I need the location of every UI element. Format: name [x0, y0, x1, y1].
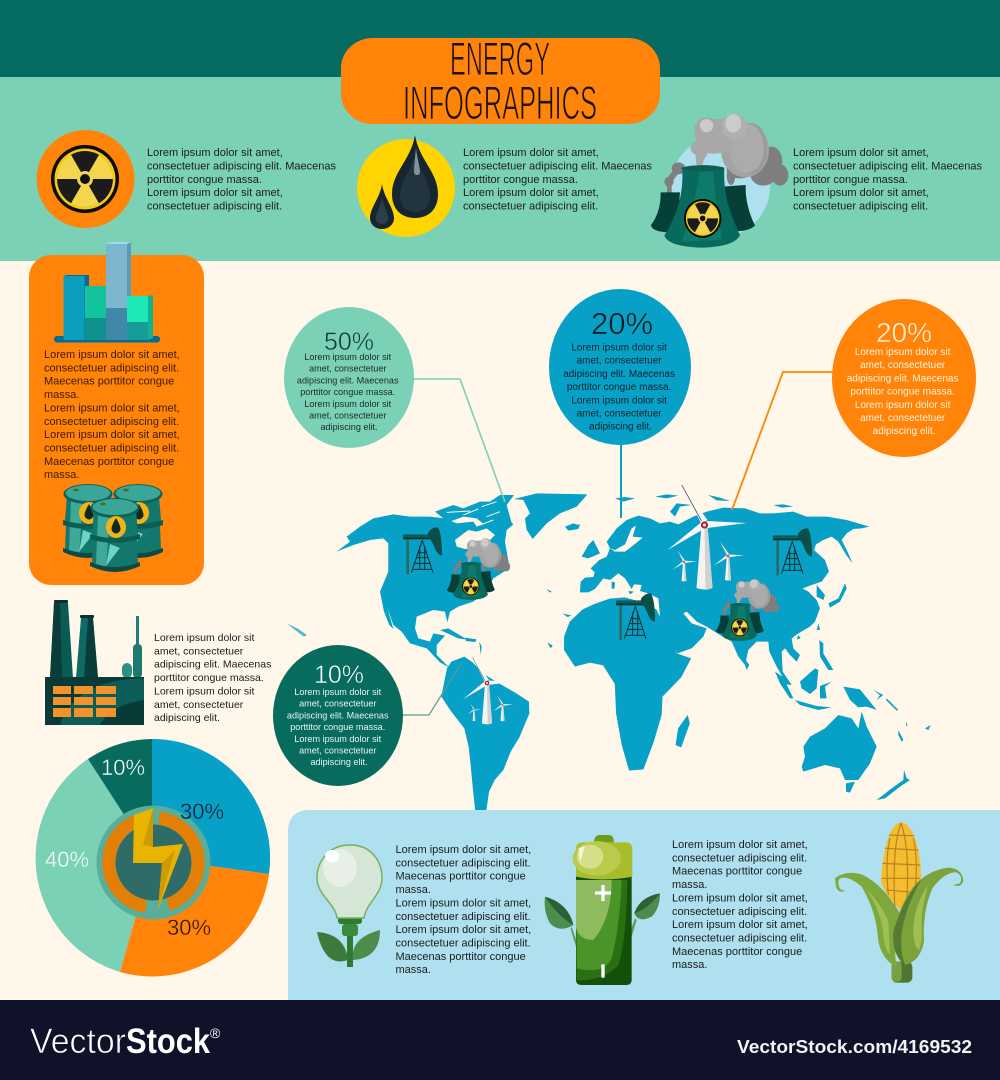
callout: 10%: amet, consectetuer [299, 699, 376, 709]
callout: blue 20%: porttitor congue massa. [567, 382, 671, 393]
title [341, 32, 660, 129]
footer watermark logo: Stock [126, 1022, 210, 1061]
text block: nuclear: porttitor congue massa. [793, 174, 908, 186]
text block: oil: consectetuer adipiscing elit. Maecenas [463, 160, 652, 172]
icon: corn [835, 822, 963, 983]
callout: blue 20%: Lorem ipsum dolor sit [571, 395, 667, 406]
text block: bulb: Maecenas porttitor congue [396, 951, 526, 963]
text block: factory: Lorem ipsum dolor sit [154, 632, 254, 644]
connector: 50% [412, 379, 505, 502]
pie chart: 30% [167, 915, 211, 940]
north america and greenland [337, 493, 587, 668]
text block: left column: Lorem ipsum dolor sit amet, [44, 349, 180, 361]
text block: radiation: Lorem ipsum dolor sit amet, [147, 187, 283, 199]
pie chart [36, 739, 270, 976]
callout: 50%: amet, consectetuer [309, 364, 386, 374]
callout: blue 20%: amet, consectetuer [577, 356, 662, 367]
callout: orange 20%: Lorem ipsum dolor sit [855, 400, 951, 411]
text block: factory: amet, consectetuer [154, 645, 244, 657]
callout: 50%: amet, consectetuer [309, 410, 386, 420]
text block: bulb: massa. [396, 964, 431, 976]
connector: blue 20% [620, 440, 622, 518]
text block: left column: consectetuer adipiscing elit. [44, 416, 179, 428]
callout: blue 20%: Lorem ipsum dolor sit [571, 342, 667, 354]
text block: oil: consectetuer adipiscing elit. [463, 201, 598, 213]
callout: orange 20%: Lorem ipsum dolor sit [855, 347, 951, 358]
text block: left column: Lorem ipsum dolor sit amet, [44, 402, 180, 414]
text block: left column: Lorem ipsum dolor sit amet, [44, 429, 180, 441]
callout: orange 20% [832, 299, 976, 457]
text block: nuclear: consectetuer adipiscing elit. Maecenas [793, 160, 982, 172]
callout: blue 20%: amet, consectetuer [577, 408, 662, 420]
text block: factory: amet, consectetuer [154, 699, 244, 711]
text block: left column: Maecenas porttitor congue [44, 376, 174, 388]
text block: nuclear: Lorem ipsum dolor sit amet, [793, 187, 929, 199]
hawaii, south america, africa, madagascar [287, 597, 691, 810]
callout: 50%: Lorem ipsum dolor sit [304, 352, 392, 362]
icon: pump jack Africa [616, 593, 655, 640]
callout: 10%: adipiscing elit. [310, 757, 368, 767]
footer watermark logo [30, 1022, 210, 1061]
oceania and south-east asia [775, 623, 931, 800]
icon: wind turbines South America [463, 657, 514, 725]
text block: oil: porttitor congue massa. [463, 174, 578, 186]
text block: bulb: Lorem ipsum dolor sit amet, [396, 844, 531, 856]
text block: bulb: Maecenas porttitor congue [396, 871, 526, 883]
connector: 10% [400, 662, 462, 715]
text block: bulb: consectetuer adipiscing elit. [396, 937, 531, 949]
callout: blue 20%: 20% [591, 306, 653, 341]
icon: pump jack Asia [773, 528, 812, 575]
text block: left column: Maecenas porttitor congue [44, 456, 174, 468]
connector: orange 20% [732, 372, 835, 510]
callout: orange 20%: adipiscing elit. Maecenas [847, 373, 958, 384]
callout: 10%: Lorem ipsum dolor sit [294, 687, 382, 697]
callout: blue 20% [549, 289, 691, 445]
callout: 50%: porttitor congue massa. [300, 387, 395, 397]
footer bar [0, 1000, 1000, 1080]
text block: battery: massa. [672, 879, 707, 891]
icon: oil barrels [63, 484, 163, 572]
text block: bulb: Lorem ipsum dolor sit amet, [396, 924, 531, 936]
footer url: VectorStock.com/4169532 [737, 1036, 972, 1057]
callout: orange 20%: porttitor congue massa. [850, 387, 955, 398]
icon: green battery [545, 835, 660, 985]
text block: left column: consectetuer adipiscing elit. [44, 362, 179, 374]
text block: battery: Maecenas porttitor congue [672, 946, 802, 958]
text block: oil: Lorem ipsum dolor sit amet, [463, 187, 599, 199]
icon: wind turbines Russia [668, 485, 746, 590]
text block: nuclear: Lorem ipsum dolor sit amet, [793, 147, 929, 159]
text block: bulb: consectetuer adipiscing elit. [396, 857, 531, 869]
top header band [0, 0, 1000, 77]
text block: battery: massa. [672, 959, 707, 971]
text block: left column: massa. [44, 469, 79, 481]
text block: radiation: consectetuer adipiscing elit. Maecenas [147, 160, 336, 172]
callout: 50%: adipiscing elit. [320, 422, 378, 432]
callout: 50%: 50% [324, 328, 374, 356]
callout: 10%: Lorem ipsum dolor sit [294, 734, 382, 744]
text block: radiation: porttitor congue massa. [147, 174, 262, 186]
callout: 10%: porttitor congue massa. [290, 722, 385, 732]
callout: 50%: Lorem ipsum dolor sit [304, 399, 392, 409]
callout: 10%: 10% [314, 661, 364, 689]
text block: oil: Lorem ipsum dolor sit amet, [463, 147, 599, 159]
icon: nuclear plant Asia [716, 579, 779, 641]
icon: nuclear plant North America [447, 538, 510, 600]
pie chart: 40% [45, 847, 89, 872]
panel: top intro band [0, 77, 1000, 261]
footer watermark logo: Vector [30, 1022, 126, 1061]
text block: bulb: Lorem ipsum dolor sit amet, [396, 897, 531, 909]
text block: left column: consectetuer adipiscing elit. [44, 442, 179, 454]
icon: oil drops [357, 135, 455, 237]
callout: 10% [273, 645, 403, 786]
callout: orange 20%: amet, consectetuer [860, 360, 946, 371]
icon: nuclear plant [651, 113, 788, 248]
callout: 50% [284, 307, 414, 448]
callout: 50%: adipiscing elit. Maecenas [297, 375, 399, 385]
icon: factory [45, 600, 144, 725]
text block: radiation: Lorem ipsum dolor sit amet, [147, 147, 283, 159]
callout: 10%: adipiscing elit. Maecenas [287, 710, 389, 720]
text block: nuclear: consectetuer adipiscing elit. [793, 201, 928, 213]
text block: factory: adipiscing elit. Maecenas [154, 659, 271, 671]
callout: orange 20%: adipiscing elit. [873, 426, 935, 437]
panel: bottom light-blue [288, 810, 1000, 1000]
text block: battery: Lorem ipsum dolor sit amet, [672, 919, 808, 931]
icon: radiation badge [36, 130, 134, 228]
text block: radiation: consectetuer adipiscing elit. [147, 201, 282, 213]
world map [287, 493, 931, 810]
icon: pump jack North America [403, 527, 442, 574]
text block: factory: porttitor congue massa. [154, 672, 264, 684]
text block: factory: adipiscing elit. [154, 712, 220, 724]
text block: battery: Lorem ipsum dolor sit amet, [672, 892, 808, 904]
callout: orange 20%: amet, consectetuer [860, 413, 946, 424]
footer registered mark: ® [210, 1025, 221, 1041]
icon: bulb with leaves [317, 845, 382, 967]
eurasia [565, 494, 869, 685]
text block: battery: Lorem ipsum dolor sit amet, [672, 839, 808, 851]
callout: blue 20%: adipiscing elit. [589, 422, 652, 433]
text block: battery: consectetuer adipiscing elit. [672, 852, 807, 864]
text block: left column: massa. [44, 389, 79, 401]
pie chart: 30% [180, 799, 224, 824]
text block: factory: Lorem ipsum dolor sit [154, 685, 254, 697]
callout: blue 20%: adipiscing elit. Maecenas [563, 369, 675, 380]
chart icon: 3D bars [54, 242, 160, 342]
text block: battery: Maecenas porttitor congue [672, 866, 802, 878]
title: INFOGRAPHICS [403, 76, 597, 129]
title: ENERGY [450, 32, 550, 85]
callout: 10%: amet, consectetuer [299, 746, 376, 756]
text block: bulb: massa. [396, 884, 431, 896]
panel: orange left column [29, 242, 204, 585]
text block: bulb: consectetuer adipiscing elit. [396, 911, 531, 923]
icon: energy bolt [96, 806, 210, 920]
pie chart: 10% [101, 755, 145, 780]
callout: orange 20%: 20% [876, 317, 932, 348]
text block: battery: consectetuer adipiscing elit. [672, 932, 807, 944]
text block: battery: consectetuer adipiscing elit. [672, 906, 807, 918]
